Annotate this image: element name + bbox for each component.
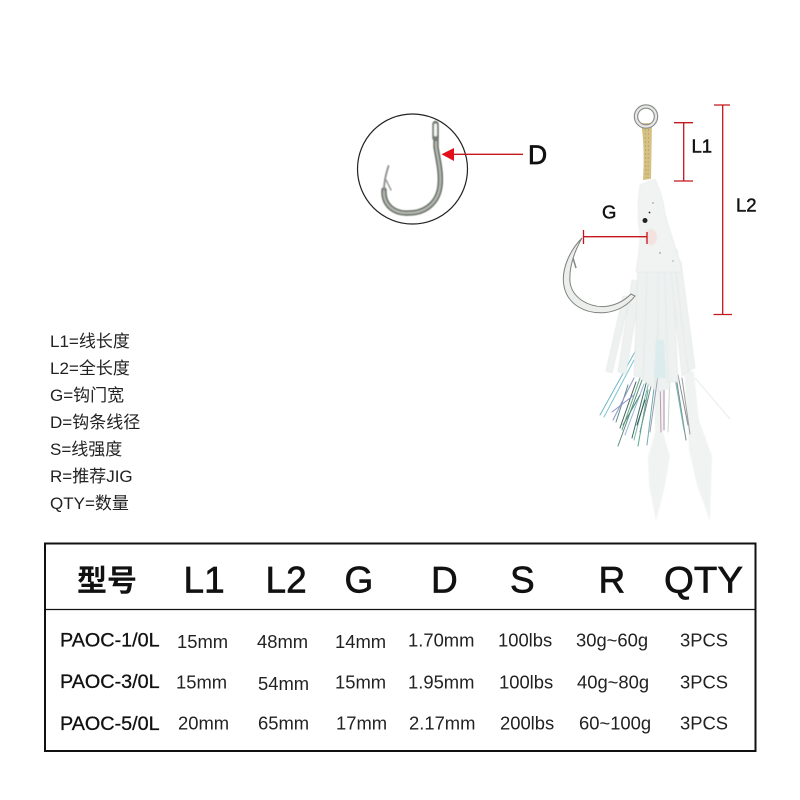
hook barb	[573, 258, 576, 268]
header row: L1	[184, 560, 225, 600]
lure head	[636, 179, 682, 272]
icon: flash strands	[600, 350, 690, 446]
solid ring	[636, 106, 656, 126]
pink throat mark	[645, 229, 657, 245]
dimension L2: L2	[736, 194, 757, 216]
specification table	[45, 544, 756, 751]
arrow pointing to hook	[442, 148, 523, 161]
row PAOC-5/0L: 2.17mm	[409, 712, 475, 734]
lure product photo	[563, 106, 730, 521]
table frame	[45, 544, 756, 751]
header row: D	[431, 560, 458, 600]
header row: 型号	[77, 565, 137, 598]
row PAOC-1/0L: 100lbs	[498, 630, 552, 650]
header divider	[45, 608, 755, 610]
tail fins	[648, 368, 712, 521]
dimension L1: L1	[692, 136, 712, 156]
header row: L2	[266, 560, 307, 600]
row PAOC-3/0L: 15mm	[335, 672, 386, 692]
legend text block	[50, 332, 140, 513]
circle outline	[358, 114, 468, 224]
row PAOC-1/0L: 14mm	[335, 631, 386, 652]
legend text block: L1=线长度	[50, 332, 130, 351]
lure eye and speckles	[642, 202, 674, 262]
row PAOC-5/0L: 3PCS	[680, 712, 728, 734]
header row: R	[598, 560, 625, 600]
row PAOC-1/0L: PAOC-1/0L	[60, 630, 160, 652]
skirt iridescent core	[654, 340, 666, 378]
legend text block: S=线强度	[50, 440, 122, 459]
skirt strands	[606, 245, 695, 392]
row PAOC-1/0L: 30g~60g	[576, 630, 648, 650]
dimension L1	[674, 123, 712, 181]
row PAOC-3/0L: 1.95mm	[408, 672, 474, 692]
row PAOC-5/0L: 17mm	[336, 712, 387, 734]
row PAOC-1/0L: 3PCS	[680, 630, 728, 650]
row PAOC-1/0L: 48mm	[257, 631, 308, 652]
legend text block: L2=全长度	[50, 359, 130, 378]
row PAOC-3/0L: 100lbs	[499, 672, 553, 692]
icon: thin tail thread	[695, 378, 730, 419]
braided assist cord	[641, 123, 652, 180]
row PAOC-1/0L: 1.70mm	[408, 630, 474, 650]
row PAOC-3/0L	[60, 671, 728, 694]
row PAOC-3/0L: 3PCS	[680, 672, 728, 692]
legend text block: G=钩门宽	[50, 386, 124, 405]
row PAOC-5/0L: 60~100g	[579, 712, 651, 734]
row PAOC-5/0L: 20mm	[178, 712, 229, 734]
dimension G	[584, 202, 647, 244]
row PAOC-3/0L: 15mm	[176, 672, 227, 692]
header row: S	[510, 560, 535, 600]
icon: small hook	[384, 124, 440, 213]
label D: D	[528, 140, 547, 170]
large hook	[563, 238, 635, 313]
row PAOC-5/0L: PAOC-5/0L	[60, 713, 160, 735]
legend text block: R=推荐JIG	[50, 467, 133, 486]
row PAOC-5/0L: 65mm	[258, 712, 309, 734]
header row: QTY	[664, 560, 743, 600]
row PAOC-3/0L: 40g~80g	[577, 672, 649, 692]
row PAOC-5/0L: 200lbs	[500, 712, 554, 734]
row PAOC-1/0L	[60, 630, 728, 652]
row PAOC-3/0L: 54mm	[258, 673, 309, 694]
legend text block: D=钩条线径	[50, 413, 140, 432]
legend text block: QTY=数量	[50, 494, 129, 513]
dimension G: G	[602, 202, 616, 222]
row PAOC-3/0L: PAOC-3/0L	[60, 671, 160, 693]
header row: G	[344, 560, 373, 600]
row PAOC-1/0L: 15mm	[177, 631, 228, 652]
row PAOC-5/0L	[60, 712, 728, 735]
dimension L2	[714, 105, 757, 314]
detail circle: hook wire diameter D	[358, 114, 523, 224]
header row	[77, 560, 743, 600]
